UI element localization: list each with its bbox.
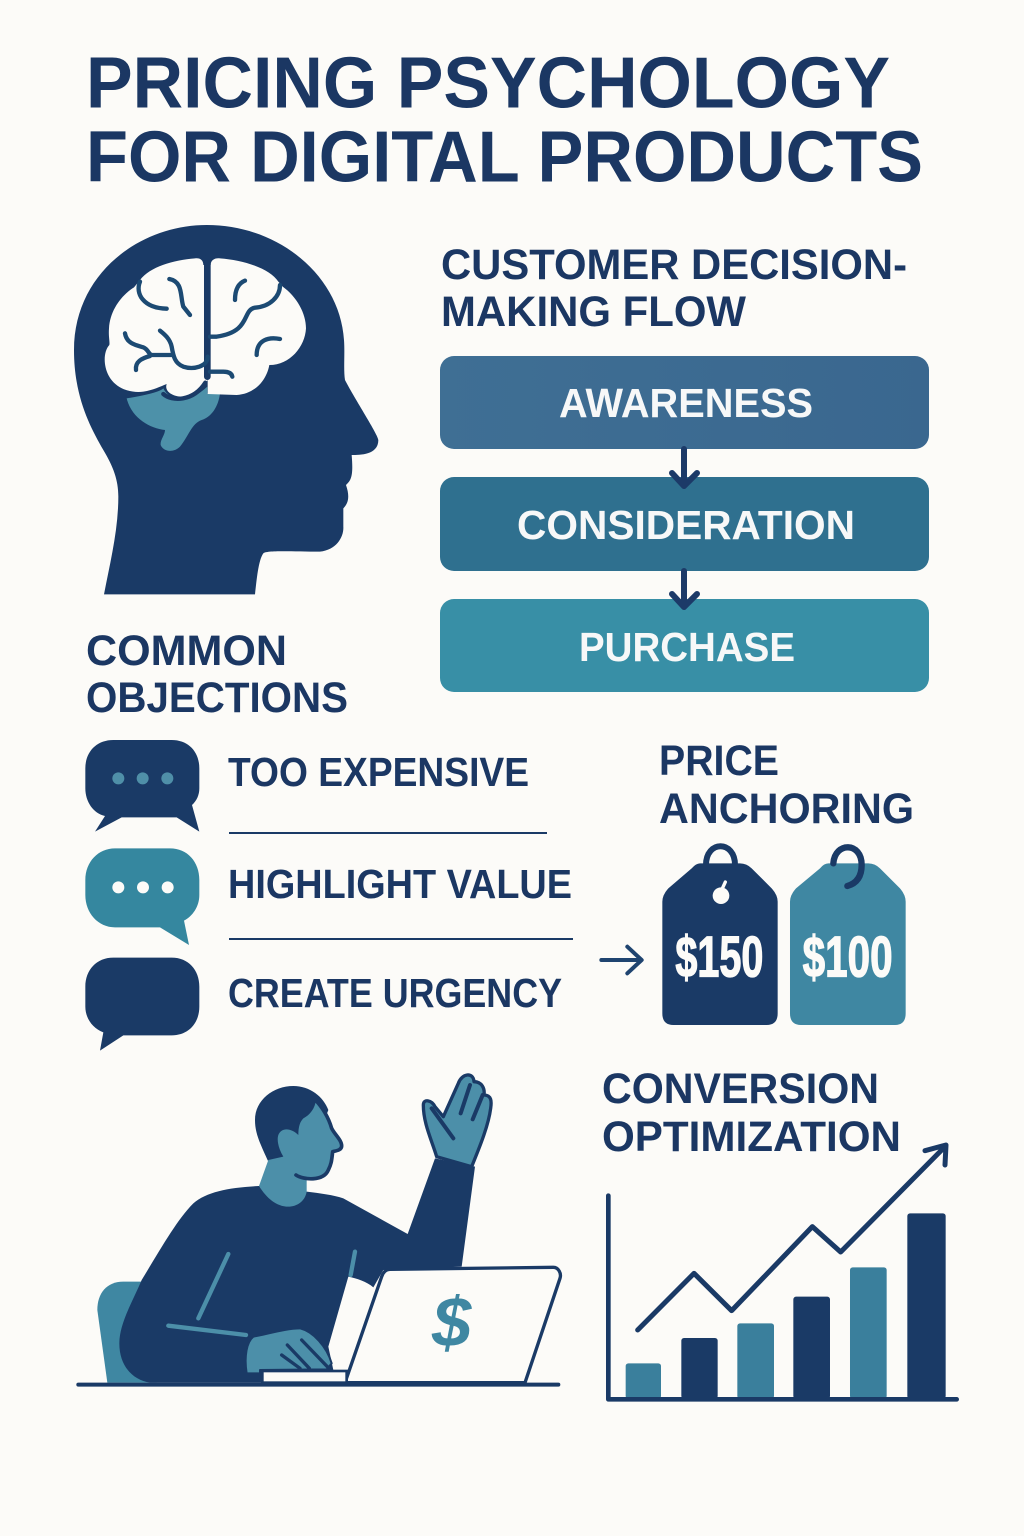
heading: common objections: OBJECTIONS xyxy=(86,674,348,722)
arrow: to price tags xyxy=(601,947,642,973)
heading: common objections: COMMON xyxy=(86,627,287,675)
heading: conversion optimization: OPTIMIZATION xyxy=(602,1113,901,1161)
icon: speech bubble with dots xyxy=(85,740,199,832)
dollar sign: $ xyxy=(431,1283,472,1362)
heading: conversion optimization xyxy=(602,1065,901,1161)
heading: price anchoring xyxy=(659,737,914,833)
icon: $100 price tag: $100 xyxy=(803,926,893,990)
text: highlight value: HIGHLIGHT VALUE xyxy=(228,861,572,907)
panel: purchase step: PURCHASE xyxy=(579,624,795,670)
heading: price anchoring: ANCHORING xyxy=(659,785,914,833)
icon: head with brain xyxy=(74,225,378,594)
illustration: person at laptop raising a hand xyxy=(78,1075,560,1385)
arrow: consideration to purchase xyxy=(672,571,697,607)
laptop xyxy=(345,1267,560,1383)
axes xyxy=(608,1196,957,1399)
keyboard xyxy=(262,1371,347,1383)
heading: customer decision-making flow xyxy=(441,241,907,336)
icon: teal speech bubble xyxy=(85,848,199,945)
panel: awareness step: AWARENESS xyxy=(559,380,813,426)
text: create urgency: CREATE URGENCY xyxy=(228,970,562,1016)
icon: plain speech bubble xyxy=(85,958,199,1051)
chair xyxy=(97,1282,157,1383)
heading: price anchoring: PRICE xyxy=(659,737,779,785)
face and neck xyxy=(259,1100,342,1207)
bars xyxy=(626,1213,946,1399)
heading: customer decision-making flow: MAKING FLOW xyxy=(441,288,746,336)
torso and raised arm xyxy=(119,1158,475,1383)
sleeve creases xyxy=(168,1252,355,1335)
panel: awareness step xyxy=(440,356,929,449)
arrow: awareness to consideration xyxy=(672,449,697,486)
hair xyxy=(255,1086,328,1162)
title: PRICING PSYCHOLOGY xyxy=(86,44,890,124)
icon: $150 price tag xyxy=(662,846,778,1025)
trend arrow xyxy=(638,1145,946,1330)
panel: purchase step xyxy=(440,599,929,692)
icon: $100 price tag xyxy=(790,847,906,1025)
title xyxy=(86,44,923,198)
heading: customer decision-making flow: CUSTOMER DECISION- xyxy=(441,241,907,289)
bar chart xyxy=(608,1145,957,1399)
panel: consideration step: CONSIDERATION xyxy=(517,502,855,548)
desk line xyxy=(78,1379,558,1391)
heading: conversion optimization: CONVERSION xyxy=(602,1065,879,1113)
hand on keyboard xyxy=(246,1328,332,1373)
icon: $150 price tag: $150 xyxy=(675,926,763,990)
heading: common objections xyxy=(86,627,348,722)
raised hand xyxy=(423,1075,491,1167)
panel: consideration step xyxy=(440,477,929,571)
text: too expensive: TOO EXPENSIVE xyxy=(228,749,529,795)
title: FOR DIGITAL PRODUCTS xyxy=(86,118,923,198)
